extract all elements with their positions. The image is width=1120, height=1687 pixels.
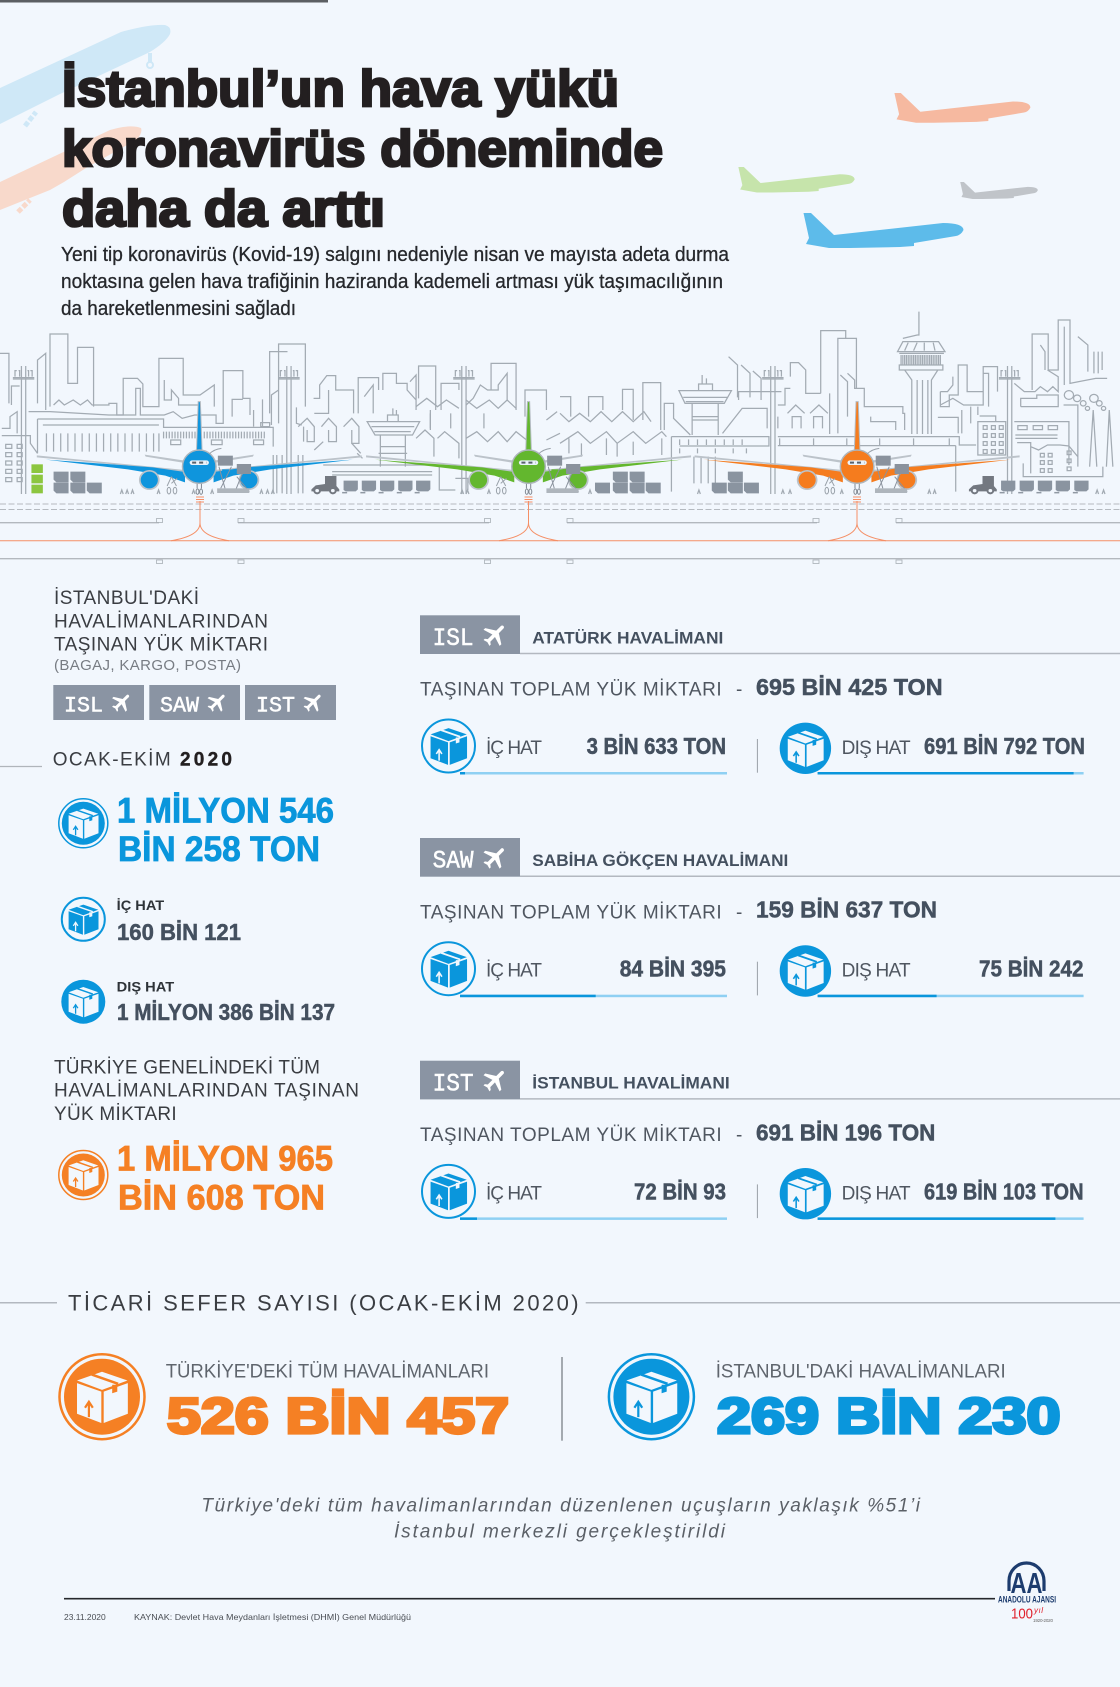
left panel: Istanbul airports total: [0, 588, 359, 1217]
icon: box: [422, 720, 475, 772]
domestic row: 3 BİN 633 TON: [587, 733, 726, 759]
icon: box: [62, 898, 105, 941]
icon: sky planes: [738, 93, 1038, 248]
stat: Istanbul flights: İSTANBUL'DAKİ HAVALİMANLARI: [716, 1361, 1006, 1382]
intro text: noktasına gelen hava trafiğinin haziranda kademeli artması yük taşımacılığının: [61, 271, 723, 293]
title: koronavirüs döneminde: [62, 120, 663, 177]
orange airplane: [695, 402, 1020, 494]
panel: Sabiha Gökçen airport: [420, 838, 1120, 997]
icon: box: [59, 1150, 108, 1200]
total: blue: 1 MİLYON 546: [117, 791, 334, 830]
city skyline right: [560, 312, 1113, 494]
title: İstanbul’un hava yükü: [62, 60, 619, 117]
panel: Sabiha Gökçen airport: -: [736, 902, 742, 923]
international row: DIŞ HAT: [842, 961, 911, 982]
airport tag: [420, 838, 1120, 877]
total: orange: BİN 608 TON: [118, 1178, 325, 1217]
intro text: [61, 244, 730, 320]
international row: 619 BİN 103 TON: [924, 1178, 1084, 1204]
panel: Istanbul airport: -: [736, 1125, 742, 1146]
panel: Atatürk airport: ATATÜRK HAVALİMANI: [532, 628, 723, 647]
cargo containers and vehicles: [31, 464, 1090, 493]
international row: [780, 723, 1085, 774]
icon: box: [780, 1168, 831, 1219]
heading: Turkey: TÜRKİYE GENELİNDEKİ TÜM: [54, 1057, 320, 1078]
stat: Istanbul flights: 269 BİN 230: [717, 1388, 1060, 1444]
airport code tags: [53, 685, 336, 720]
title: daha da arttı: [62, 180, 385, 237]
date heading: [0, 749, 232, 770]
domestic total: İÇ HAT: [117, 897, 165, 913]
panel: Sabiha Gökçen airport: SABİHA GÖKÇEN HAVALİMANI: [532, 851, 788, 870]
stat: Istanbul flights: [609, 1354, 1060, 1444]
source: KAYNAK: Devlet Hava Meydanları İşletmesi (DHMİ) Genel Müdürlüğü: [134, 1612, 411, 1622]
airport code tags: IST: [256, 694, 295, 718]
airport code tags: ISL: [64, 694, 103, 718]
domestic row: [422, 942, 727, 997]
heading: Turkey: YÜK MİKTARI: [54, 1104, 177, 1125]
international row: DIŞ HAT: [842, 738, 911, 759]
icon: box: [422, 1165, 475, 1218]
icon: box: [780, 945, 831, 997]
heading: airport cargo: TAŞINAN YÜK MİKTARI: [54, 635, 268, 656]
airport tag: [420, 1061, 1120, 1099]
icon: box: [780, 723, 831, 774]
panel: Istanbul airport: 691 BİN 196 TON: [756, 1119, 935, 1145]
heading: airport cargo: HAVALİMANLARINDAN: [54, 611, 268, 632]
domestic row: İÇ HAT: [486, 738, 542, 759]
stat: Turkey flights: TÜRKİYE'DEKİ TÜM HAVALİMANLARI: [166, 1361, 489, 1382]
international row: [780, 1168, 1084, 1220]
domestic row: İÇ HAT: [486, 961, 542, 982]
logo: 1920-2020: [1033, 1618, 1053, 1623]
runway: [0, 497, 1120, 564]
total: blue: BİN 258 TON: [118, 830, 320, 869]
heading: Turkey: [54, 1057, 359, 1125]
panel: Sabiha Gökçen airport: TAŞINAN TOPLAM YÜK MİKTARI: [420, 902, 722, 923]
domestic row: İÇ HAT: [486, 1183, 542, 1204]
airport tag: IST: [433, 1069, 474, 1098]
logo: ANADOLU AJANSI: [998, 1594, 1056, 1604]
title: [62, 60, 663, 237]
international total: 1 MİLYON 386 BİN 137: [117, 999, 335, 1025]
international total: [61, 979, 335, 1025]
icon: box: [60, 1354, 144, 1439]
panel: Istanbul airport: TAŞINAN TOPLAM YÜK MİKTARI: [420, 1125, 722, 1146]
source: 23.11.2020: [64, 1612, 106, 1622]
domestic row: 84 BİN 395: [620, 956, 726, 982]
heading: airport cargo: İSTANBUL'DAKİ: [54, 588, 199, 609]
international total: DIŞ HAT: [117, 979, 175, 995]
international row: 691 BİN 792 TON: [924, 733, 1085, 759]
logo: AA: [1010, 1568, 1043, 1600]
heading: airport cargo: (BAGAJ, KARGO, POSTA): [54, 657, 241, 674]
domestic total: [62, 897, 241, 945]
panel: Atatürk airport: [420, 615, 1120, 774]
logo: 100: [1011, 1606, 1033, 1622]
note: [201, 1495, 921, 1543]
airport code tags: SAW: [160, 694, 200, 718]
icon: box: [59, 799, 108, 848]
icon: box: [61, 980, 105, 1024]
airport tag: [420, 615, 1120, 654]
stat: Turkey flights: [60, 1354, 509, 1444]
icon: box: [422, 942, 475, 995]
top bar: [0, 0, 328, 2]
total: orange: [59, 1140, 333, 1217]
green airplane: [366, 402, 691, 494]
footer line: [64, 1598, 995, 1600]
international row: DIŞ HAT: [842, 1183, 911, 1204]
panel: Atatürk airport: TAŞINAN TOPLAM YÜK MİKTARI: [420, 680, 722, 701]
intro text: da hareketlenmesini sağladı: [61, 298, 296, 320]
airport tag: SAW: [433, 847, 474, 876]
domestic total: 160 BİN 121: [117, 919, 241, 945]
blue airplane: [37, 402, 362, 494]
total: blue: [59, 791, 334, 869]
panel: Atatürk airport: -: [736, 680, 742, 701]
domestic row: [422, 1165, 727, 1220]
logo: [998, 1563, 1056, 1623]
logo: yıl: [1033, 1606, 1043, 1615]
city skyline: [0, 334, 560, 494]
date heading: OCAK-EKİM: [53, 749, 171, 770]
airport tag: ISL: [433, 624, 474, 653]
panel: Istanbul airport: [420, 1061, 1120, 1220]
panel: Sabiha Gökçen airport: 159 BİN 637 TON: [756, 897, 937, 923]
date heading: 2020: [180, 749, 232, 770]
international row: 75 BİN 242: [979, 956, 1084, 982]
heading: flights: TİCARİ SEFER SAYISI (OCAK-EKİM 2020): [68, 1291, 579, 1316]
domestic row: 72 BİN 93: [634, 1178, 726, 1204]
intro text: Yeni tip koronavirüs (Kovid-19) salgını nedeniyle nisan ve mayısta adeta durma: [61, 244, 730, 266]
total: orange: 1 MİLYON 965: [117, 1140, 333, 1179]
panel: Atatürk airport: 695 BİN 425 TON: [756, 674, 943, 700]
note: İstanbul merkezli gerçekleştirildi: [394, 1522, 726, 1543]
heading: airport cargo: [54, 588, 268, 674]
icon: box: [609, 1354, 694, 1439]
panel: Istanbul airport: İSTANBUL HAVALİMANI: [532, 1074, 730, 1093]
heading: Turkey: HAVALİMANLARINDAN TAŞINAN: [54, 1081, 359, 1102]
stat: Turkey flights: 526 BİN 457: [167, 1388, 509, 1444]
international row: [780, 945, 1084, 997]
faded large planes: [0, 25, 170, 212]
note: Türkiye'deki tüm havalimanlarından düzenlenen uçuşların yaklaşık %51’i: [201, 1495, 921, 1516]
domestic row: [422, 720, 727, 774]
